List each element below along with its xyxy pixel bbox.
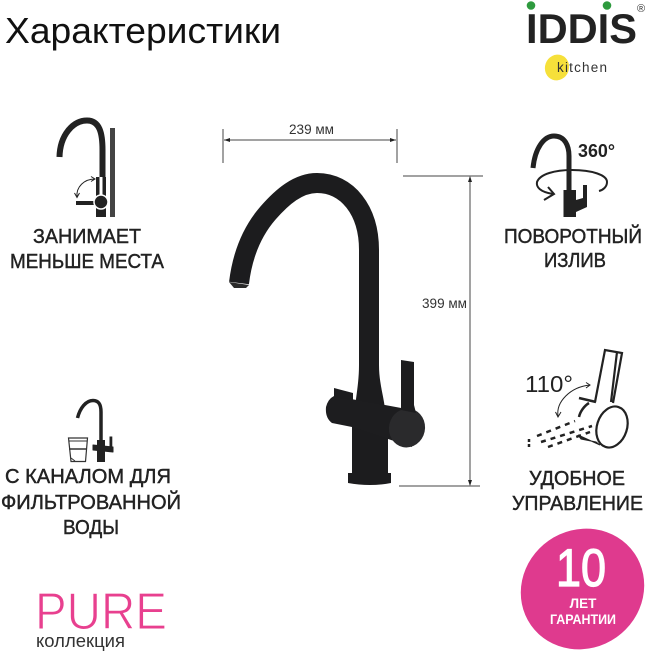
dimension: width 239 mm	[223, 121, 397, 163]
label: filtered water channel: С КАНАЛОМ ДЛЯ	[5, 465, 171, 488]
logo: IDDIS kitchen: kitchen	[557, 60, 607, 75]
collection name: PURE: коллекция	[36, 630, 125, 651]
label: space saving: МЕНЬШЕ МЕСТА	[10, 250, 164, 273]
label: convenient control	[512, 467, 643, 515]
main faucet drawing	[229, 183, 429, 485]
label: space saving	[10, 225, 164, 273]
label: filtered water channel	[1, 465, 181, 539]
badge: 10 year warranty: ГАРАНТИИ	[550, 612, 616, 627]
label: swivel spout	[504, 224, 642, 272]
collection name: PURE: PURE	[35, 583, 167, 641]
logo: IDDIS kitchen	[526, 1, 645, 84]
label: convenient control: УПРАВЛЕНИЕ	[512, 492, 643, 515]
logo: IDDIS kitchen: IDDIS	[526, 5, 637, 52]
faucet right lever	[401, 360, 416, 413]
label: filtered water channel: ВОДЫ	[63, 516, 119, 539]
badge: 10 year warranty	[497, 505, 647, 651]
label: convenient control: УДОБНОЕ	[529, 467, 625, 490]
dimension: height 399 mm: 399 мм	[422, 295, 467, 311]
dimension: height 399 mm	[399, 176, 483, 486]
title: Характеристики	[5, 10, 281, 51]
logo: IDDIS kitchen: ®	[637, 3, 645, 15]
label: space saving: ЗАНИМАЕТ	[33, 225, 141, 248]
badge: 10 year warranty: ЛЕТ	[570, 596, 597, 611]
faucet left lever	[334, 388, 353, 400]
badge: 10 year warranty: 10	[556, 539, 606, 598]
icon: 110 degree lever: 110°	[525, 371, 573, 397]
icon: 360 swivel spout: 360°	[578, 141, 615, 161]
icon: 360 swivel spout	[533, 136, 615, 217]
faucet right cap	[385, 405, 429, 451]
faucet cross barrel	[326, 396, 412, 447]
label: swivel spout: ИЗЛИВ	[544, 249, 606, 272]
label: filtered water channel: ФИЛЬТРОВАННОЙ	[1, 490, 181, 514]
icon: faucet with filter channel and glass	[68, 400, 113, 462]
dimension: width 239 mm: 239 мм	[289, 121, 334, 137]
icon: compact faucet near wall	[60, 120, 115, 217]
icon: 110 degree lever	[525, 350, 633, 452]
faucet body	[348, 365, 391, 485]
